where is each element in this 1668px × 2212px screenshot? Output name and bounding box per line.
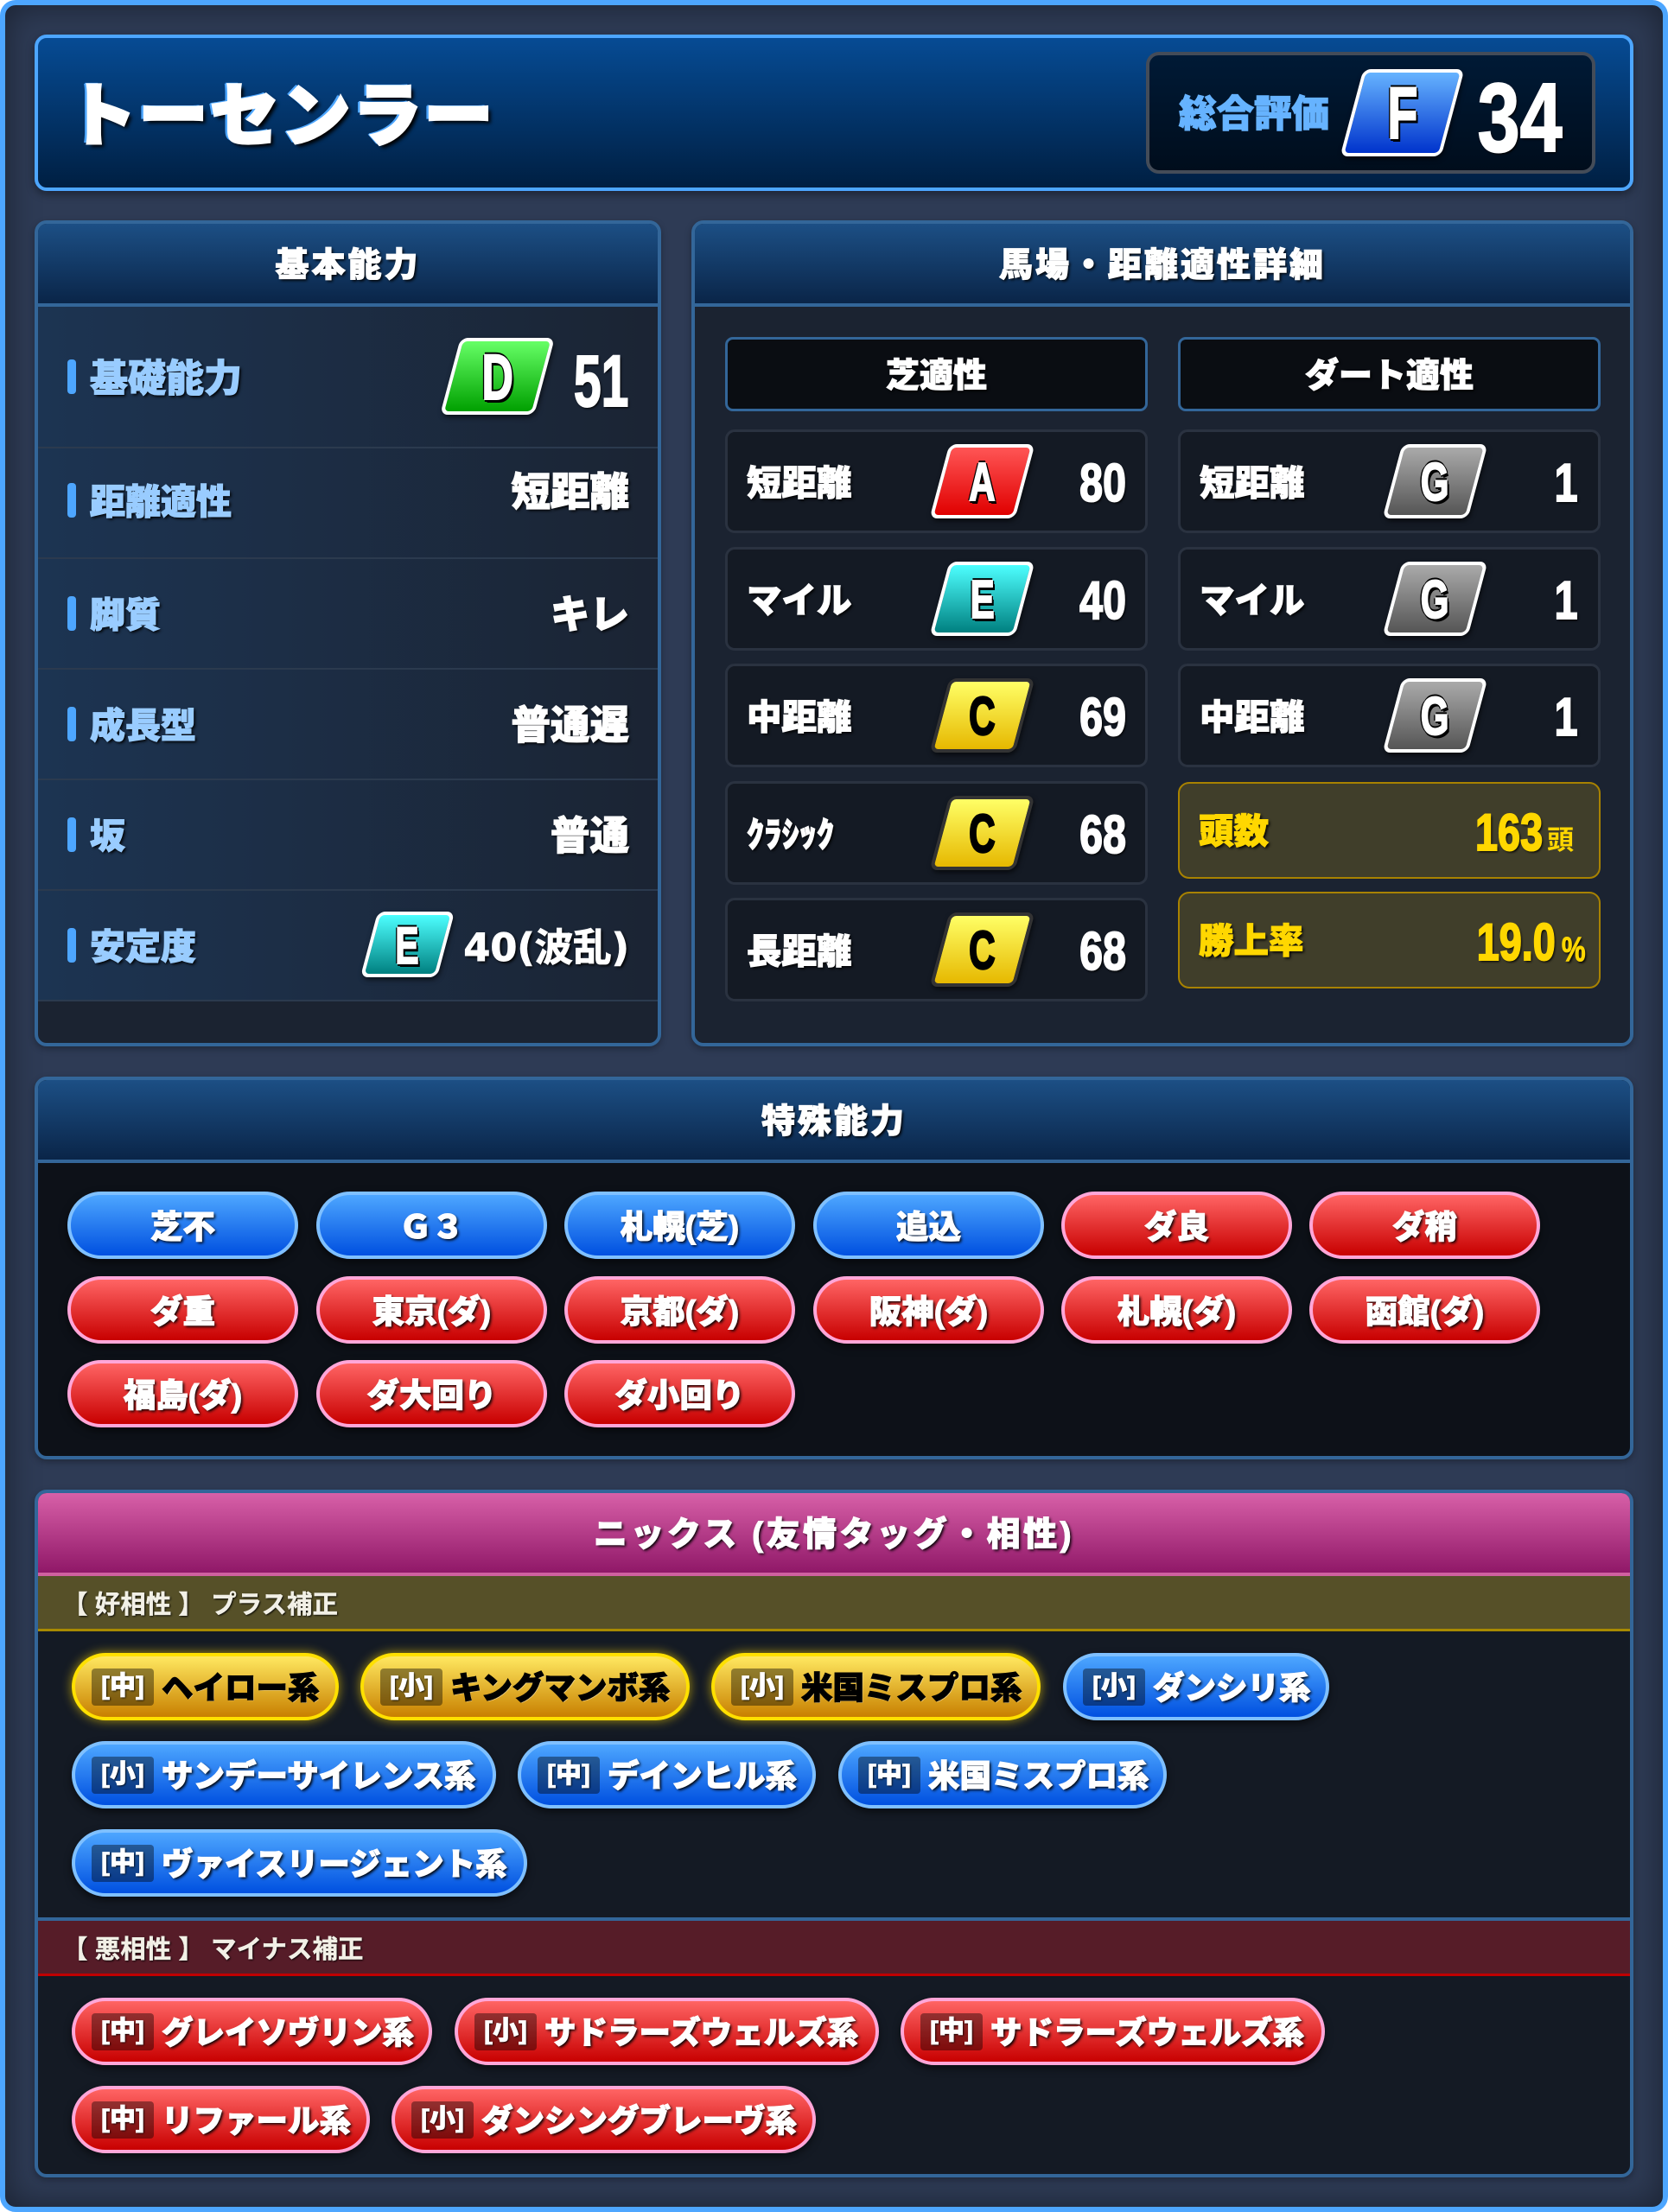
ability pills: Ｇ３ [399, 1209, 464, 1245]
good compatibility pills: キングマンボ系 [450, 1670, 670, 1706]
win rate stat [1178, 892, 1601, 988]
bad compatibility pills: グレイソヴリン系 [162, 2015, 414, 2050]
subheading: bad compatibility [38, 1917, 1630, 1976]
good compatibility pills: [小] [1092, 1672, 1136, 1700]
badge G: G [1421, 453, 1449, 512]
turf long [725, 898, 1148, 1001]
subheading: turf: 芝適性 [886, 358, 987, 395]
bad compatibility pills [71, 1998, 1326, 2158]
bad compatibility pills: [中] [101, 2105, 144, 2133]
label [67, 817, 128, 856]
label: 安定度 [90, 927, 196, 967]
subheading: dirt: ダート適性 [1305, 358, 1474, 395]
good compatibility pills: 米国ミスプロ系 [801, 1670, 1022, 1706]
ability pills: 福島(ダ) [124, 1377, 242, 1414]
value: 40(波乱) [463, 926, 629, 969]
row: base ability [38, 307, 658, 448]
head count stat [1178, 782, 1601, 879]
bad compatibility pills: [小] [484, 2017, 527, 2045]
good compatibility pills: [中] [547, 1760, 590, 1789]
bad compatibility pills: [中] [101, 2017, 144, 2045]
label: 成長型 [90, 706, 196, 746]
badge C: C [969, 804, 996, 864]
label: マイル [1200, 581, 1305, 620]
overall rating box [1146, 52, 1595, 174]
ability pills: ダ良 [1144, 1209, 1209, 1245]
dirt sprint [1178, 429, 1601, 533]
overall score: 34 [1478, 63, 1563, 172]
good compatibility pills: サンデーサイレンス系 [162, 1758, 476, 1794]
row: growth type [38, 670, 658, 780]
label: ｸﾗｼｯｸ [747, 815, 834, 855]
heading: nicks [38, 1493, 1630, 1576]
badge C: C [969, 921, 996, 980]
good compatibility pills: [小] [741, 1672, 784, 1700]
score: 68 [1079, 922, 1126, 982]
subheading: turf [725, 337, 1148, 411]
heading: basic abilities [38, 224, 658, 307]
value: 普通遅 [511, 703, 629, 747]
ability pills: ダ大回り [366, 1377, 496, 1414]
bad compatibility pills: サドラーズウェルズ系 [990, 2015, 1304, 2050]
score: 69 [1079, 688, 1126, 747]
bad compatibility pills: [小] [421, 2105, 464, 2133]
subheading: good compatibility [38, 1576, 1630, 1631]
score 51: 51 [573, 340, 628, 422]
good compatibility pills: 米国ミスプロ系 [928, 1758, 1149, 1794]
score: 68 [1079, 805, 1126, 865]
title: トーセンラー [67, 78, 495, 155]
overall rating label: 総合評価 [1179, 94, 1329, 136]
ability pills: 阪神(ダ) [869, 1294, 988, 1330]
label: 基礎能力 [90, 358, 242, 400]
turf middle [725, 664, 1148, 767]
heading: special abilities [38, 1080, 1630, 1163]
value: 19.0 [1477, 913, 1556, 971]
ability pills: 芝不 [150, 1209, 215, 1245]
label: 脚質 [90, 595, 161, 635]
row: stability [38, 891, 658, 1001]
score: 1 [1554, 454, 1577, 513]
label: 短距離 [1200, 463, 1305, 503]
unit: % [1562, 931, 1586, 969]
label: 中距離 [747, 697, 852, 737]
subheading: good compatibility: 【 好相性 】 プラス補正 [62, 1591, 338, 1619]
bad compatibility pills: サドラーズウェルズ系 [544, 2015, 858, 2050]
label: 坂 [90, 817, 125, 856]
ability pills: 札幌(芝) [621, 1209, 739, 1245]
good compatibility pills: ヘイロー系 [162, 1670, 320, 1706]
dirt middle [1178, 664, 1601, 767]
label: 短距離 [747, 463, 852, 503]
value: 短距離 [511, 470, 629, 514]
badge A: A [969, 453, 996, 512]
value: キレ [551, 593, 629, 637]
label: 中距離 [1200, 697, 1305, 737]
subheading: dirt [1178, 337, 1601, 411]
ability pills [67, 1192, 1540, 1429]
ability pills: 札幌(ダ) [1117, 1294, 1236, 1330]
bad compatibility pills: リファール系 [162, 2103, 351, 2139]
good compatibility pills [64, 1645, 1330, 1901]
panel: special abilities [35, 1077, 1633, 1459]
good compatibility pills: [小] [390, 1672, 433, 1700]
score: 1 [1554, 571, 1577, 631]
turf mile [725, 547, 1148, 651]
value: 163 [1475, 804, 1543, 861]
score: 40 [1079, 571, 1126, 631]
grade badge F: F [1387, 73, 1417, 154]
dirt mile [1178, 547, 1601, 651]
heading: special abilities: 特殊能力 [761, 1103, 907, 1141]
ability pills: 函館(ダ) [1366, 1294, 1484, 1330]
header banner [35, 35, 1633, 191]
good compatibility pills: ダンシリ系 [1153, 1670, 1310, 1706]
turf sprint [725, 429, 1148, 533]
row: running style [38, 559, 658, 670]
label: 勝上率 [1199, 921, 1303, 961]
row: distance [38, 448, 658, 559]
panel: basic abilities [35, 220, 661, 1046]
value: 普通 [551, 814, 629, 858]
label: 長距離 [747, 931, 852, 971]
turf classic [725, 781, 1148, 885]
score: 80 [1079, 454, 1126, 513]
good compatibility pills: [小] [101, 1760, 144, 1789]
panel: track and distance aptitude [691, 220, 1633, 1046]
heading: basic abilities: 基本能力 [275, 247, 420, 284]
ability pills: 東京(ダ) [372, 1294, 491, 1330]
badge E: E [970, 570, 995, 629]
unit: 頭 [1547, 825, 1574, 855]
row: slope [38, 780, 658, 891]
ability pills: ダ重 [150, 1294, 215, 1330]
good compatibility pills: ヴァイスリージェント系 [162, 1847, 507, 1882]
heading: aptitude details: 馬場・距離適性詳細 [999, 247, 1326, 284]
heading: nicks: ニックス (友情タッグ・相性) [594, 1516, 1074, 1554]
label: マイル [747, 581, 852, 620]
label: 距離適性 [90, 482, 232, 522]
bad compatibility pills: ダンシングブレーヴ系 [481, 2103, 797, 2139]
grade badge D: D [481, 341, 513, 413]
ability pills: 追込 [896, 1209, 961, 1245]
badge G: G [1421, 686, 1449, 747]
badge C: C [969, 686, 996, 747]
heading: aptitude details [695, 224, 1630, 307]
bad compatibility pills: [中] [930, 2017, 973, 2045]
subheading: bad compatibility: 【 悪相性 】 マイナス補正 [62, 1936, 363, 1964]
good compatibility pills: デインヒル系 [608, 1758, 797, 1794]
ability pills: 京都(ダ) [621, 1294, 739, 1330]
panel: nicks [35, 1490, 1633, 2177]
ability pills: ダ稍 [1392, 1209, 1457, 1245]
good compatibility pills: [中] [101, 1672, 144, 1700]
ability pills: ダ小回り [615, 1377, 745, 1414]
badge G: G [1421, 570, 1449, 629]
good compatibility pills: [中] [868, 1760, 911, 1789]
score: 1 [1554, 688, 1577, 747]
grade badge E: E [396, 916, 419, 975]
label: 頭数 [1199, 811, 1269, 851]
good compatibility pills: [中] [101, 1848, 144, 1877]
